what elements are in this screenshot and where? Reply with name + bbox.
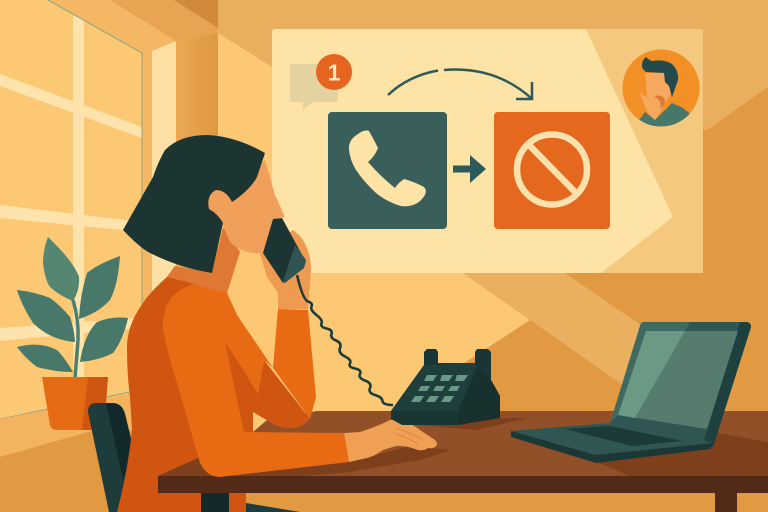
desk bbox=[158, 411, 768, 512]
base bbox=[511, 423, 714, 455]
chair bbox=[88, 403, 132, 512]
torso bbox=[117, 266, 253, 512]
hair bbox=[123, 135, 265, 273]
icon: thinking man avatar bbox=[622, 50, 700, 130]
window sill and floor bbox=[0, 391, 142, 512]
icon: phone tile bbox=[328, 112, 447, 229]
keyboard bbox=[565, 426, 682, 446]
leaves bbox=[17, 237, 128, 372]
laptop bbox=[511, 322, 751, 463]
plant bbox=[17, 237, 128, 430]
desk phone bbox=[391, 349, 528, 430]
keypad bbox=[411, 375, 468, 402]
window bbox=[0, 0, 176, 419]
arrow: straight to block bbox=[453, 155, 486, 183]
lid bbox=[610, 322, 751, 447]
icon: message bubble with badge: 1 bbox=[328, 60, 341, 86]
woman on the phone bbox=[123, 135, 437, 477]
panel: call diagram bbox=[272, 29, 703, 273]
forearm bbox=[273, 309, 316, 419]
screen bbox=[618, 331, 738, 429]
icon: block tile bbox=[494, 112, 610, 229]
icon: message bubble with badge bbox=[290, 54, 352, 110]
forearm elbow shade bbox=[225, 342, 310, 432]
pot bbox=[42, 377, 108, 430]
neck bbox=[167, 227, 240, 315]
head and ear bbox=[206, 160, 285, 253]
near arm bbox=[163, 284, 349, 477]
hand on phone bbox=[260, 230, 311, 309]
arrow: curved from phone to block bbox=[388, 70, 532, 99]
handset bbox=[263, 218, 306, 283]
fingers on desk bbox=[344, 420, 437, 462]
phone cord bbox=[297, 275, 393, 405]
